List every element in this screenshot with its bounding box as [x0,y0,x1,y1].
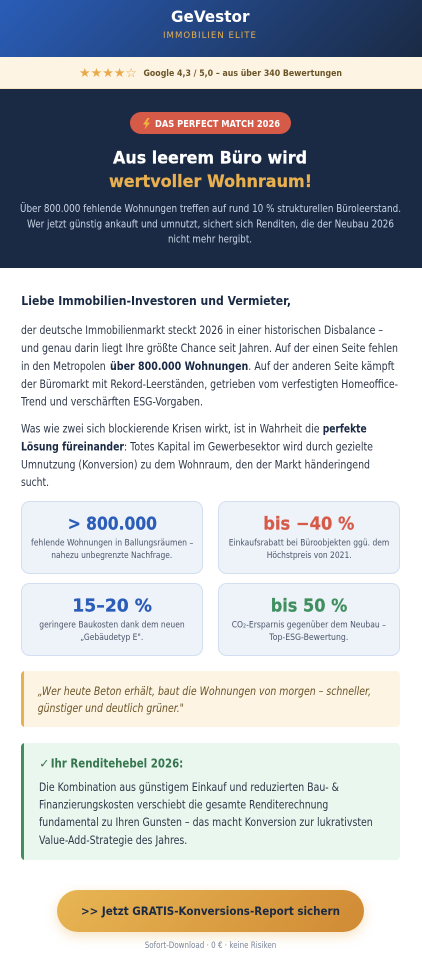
paragraph 2: sucht. [21,475,49,489]
stat value: bis 50 % [271,596,348,616]
brand tagline: IMMOBILIEN ELITE [163,31,257,41]
stat caption: CO₂-Ersparnis gegenüber dem Neubau – [232,621,386,631]
green callout [21,743,400,860]
hero panel [0,89,422,268]
stat caption: nahezu unbegrenzte Nachfrage. [51,551,172,561]
rating stars: ★★★★☆ [79,65,137,80]
paragraph 2 [21,422,373,489]
callout body [39,780,373,847]
stat caption: fehlende Wohnungen in Ballungsräumen – [31,539,194,549]
stat card: housing shortage [22,502,202,574]
stat caption: „Gebäudetyp E". [80,633,143,643]
stat card: CO2 savings [218,584,400,656]
paragraph 2: : Totes Kapital im Gewerbesektor wird durch gezielte [124,440,373,454]
stat caption: geringere Baukosten dank dem neuen [39,621,185,631]
rating bar [0,57,422,89]
hero title: Aus leerem Büro wird [113,148,307,168]
stat caption [39,621,185,643]
callout heading: ✓ [39,757,49,771]
greeting heading: Liebe Immobilien-Investoren und Vermieter, [21,294,291,308]
callout body: Die Kombination aus günstigem Einkauf und reduzierten Bau- & [39,780,339,794]
rating text: Google 4,3 / 5,0 – aus über 340 Bewertungen [144,69,342,79]
stat caption [31,539,194,561]
hero description [20,202,401,246]
paragraph 1: . Auf der anderen Seite kämpft [248,359,395,373]
badge: DAS PERFECT MATCH 2026 [155,119,280,130]
hero description: nicht mehr hergibt. [168,232,252,246]
stat caption: Einkaufsrabatt bei Büroobjekten ggü. dem [229,539,389,549]
paragraph 2: Was wie zwei sich blockierende Krisen wirkt, ist in Wahrheit die [21,422,320,436]
stat card: construction cost [22,584,202,656]
brand name: GeVestor [171,7,250,26]
stat caption [229,539,389,561]
hero title: wertvoller Wohnraum! [109,172,312,192]
icon: lightning bolt [143,118,150,130]
paragraph 1: Trend und verschärften ESG-Vorgaben. [20,394,203,408]
paragraph 2: perfekte [323,422,367,436]
quote callout [21,671,400,727]
stat caption: Top-ESG-Bewertung. [268,633,348,643]
callout body: Value-Add-Strategie des Jahres. [39,833,187,847]
CTA button [57,890,364,932]
paragraph 1: über 800.000 Wohnungen [110,359,248,373]
hero title [109,148,312,192]
stat card: purchase discount [218,502,400,574]
stat caption: Höchstpreis von 2021. [267,551,352,561]
quote text [38,684,371,715]
paragraph 1: in den Metropolen [21,359,106,373]
stat value: > 800.000 [68,514,157,534]
stat caption [232,621,386,643]
stat value: 15–20 % [72,596,152,616]
paragraph 1 [20,323,398,408]
header [0,0,422,57]
badge [130,112,291,134]
paragraph 2: Lösung füreinander [21,440,124,454]
CTA button: >> Jetzt GRATIS-Konversions-Report sichern [81,904,340,918]
callout body: Finanzierungskosten verschiebt die gesamte Renditerechnung [39,798,328,812]
quote text: günstiger und deutlich grüner." [38,701,184,715]
stat value: bis −40 % [263,514,355,534]
callout heading: Ihr Renditehebel 2026: [51,757,183,771]
fine print: Sofort-Download · 0 € · keine Risiken [145,941,276,951]
